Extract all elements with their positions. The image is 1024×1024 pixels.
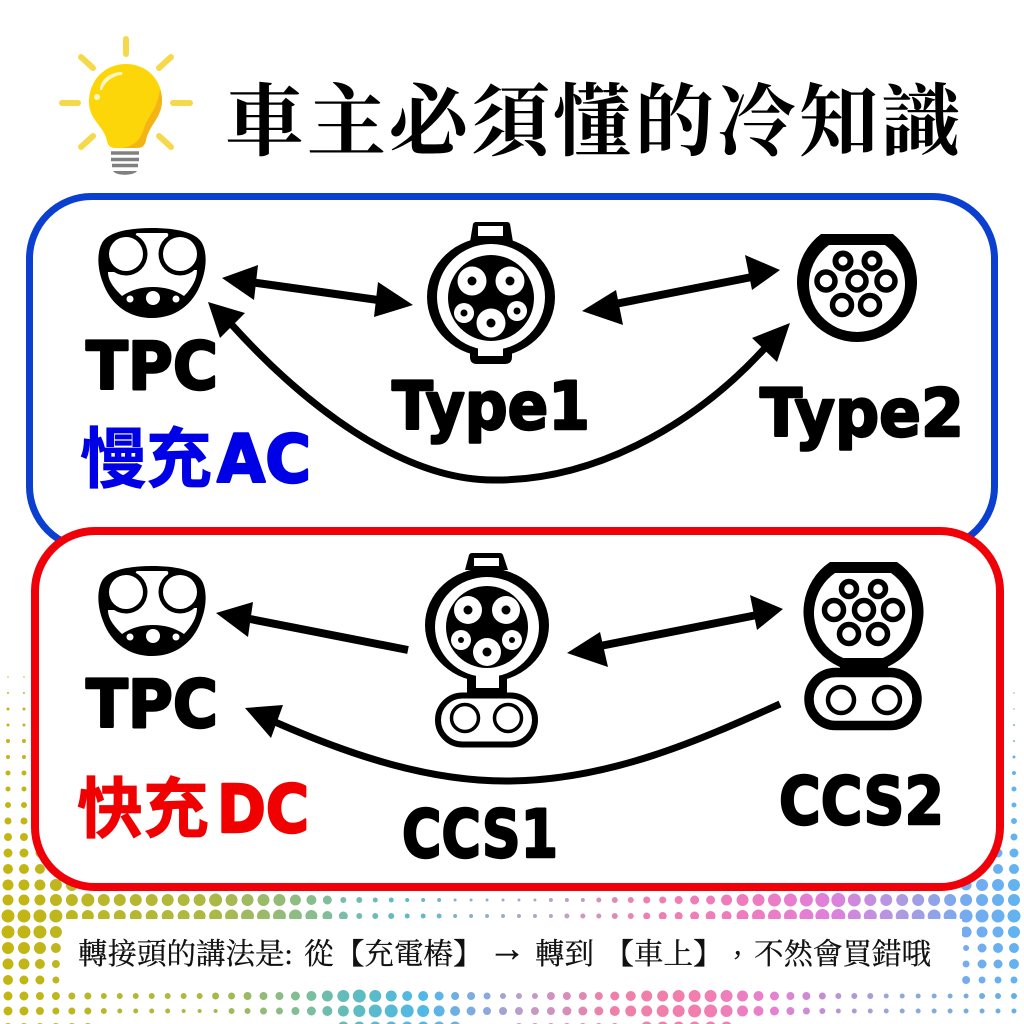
note text: 轉到 bbox=[535, 938, 594, 971]
note text: 從 bbox=[304, 938, 334, 971]
label: Type1: Type1 bbox=[392, 368, 590, 445]
arrow: CCS1 to CCS2 two-way bbox=[567, 595, 783, 667]
note text: 【充電樁】 bbox=[335, 938, 483, 971]
panel: slow charging AC bbox=[30, 196, 994, 548]
background: halftone dot pattern bbox=[8, 677, 1014, 1024]
note text: 不然會買錯哦 bbox=[754, 938, 932, 971]
arrow: CCS1 to TPC bbox=[216, 602, 408, 650]
label: TPC (DC): TPC bbox=[86, 666, 218, 743]
label: slow charge AC: 慢充 bbox=[80, 422, 212, 496]
icon: CCS2 connector bbox=[804, 562, 924, 726]
arrow: TPC to Type1 two-way bbox=[222, 265, 413, 317]
note text: 轉接頭的講法是: bbox=[78, 938, 293, 971]
icon: Type2 connector bbox=[797, 234, 917, 342]
icon: CCS1 connector bbox=[425, 553, 549, 744]
label: CCS2: CCS2 bbox=[779, 763, 944, 840]
panel: fast charging DC bbox=[35, 531, 1000, 887]
note band bbox=[63, 919, 962, 982]
arrow: CCS2 to TPC curve bbox=[245, 704, 780, 781]
arrow: Type1 to Type2 two-way bbox=[582, 255, 780, 325]
icon: light bulb bbox=[62, 39, 190, 175]
label: fast charge DC: 快充 bbox=[77, 772, 209, 846]
arrow: TPC to Type2 curve bbox=[208, 302, 790, 480]
label: Type2: Type2 bbox=[760, 375, 964, 452]
label: fast charge DC: DC bbox=[217, 771, 309, 848]
label: TPC (AC): TPC bbox=[86, 328, 218, 405]
icon: Type1 connector bbox=[427, 222, 555, 364]
label: CCS1: CCS1 bbox=[402, 796, 558, 873]
icon: TPC connector (AC) bbox=[98, 228, 206, 318]
label: slow charge AC: AC bbox=[217, 421, 311, 498]
note text: ， bbox=[723, 942, 753, 974]
icon: TPC connector (DC) bbox=[98, 566, 206, 656]
note text: 【車上】 bbox=[604, 938, 723, 971]
note text: → bbox=[488, 928, 526, 970]
title: 車主必須懂的冷知識 bbox=[225, 80, 964, 167]
